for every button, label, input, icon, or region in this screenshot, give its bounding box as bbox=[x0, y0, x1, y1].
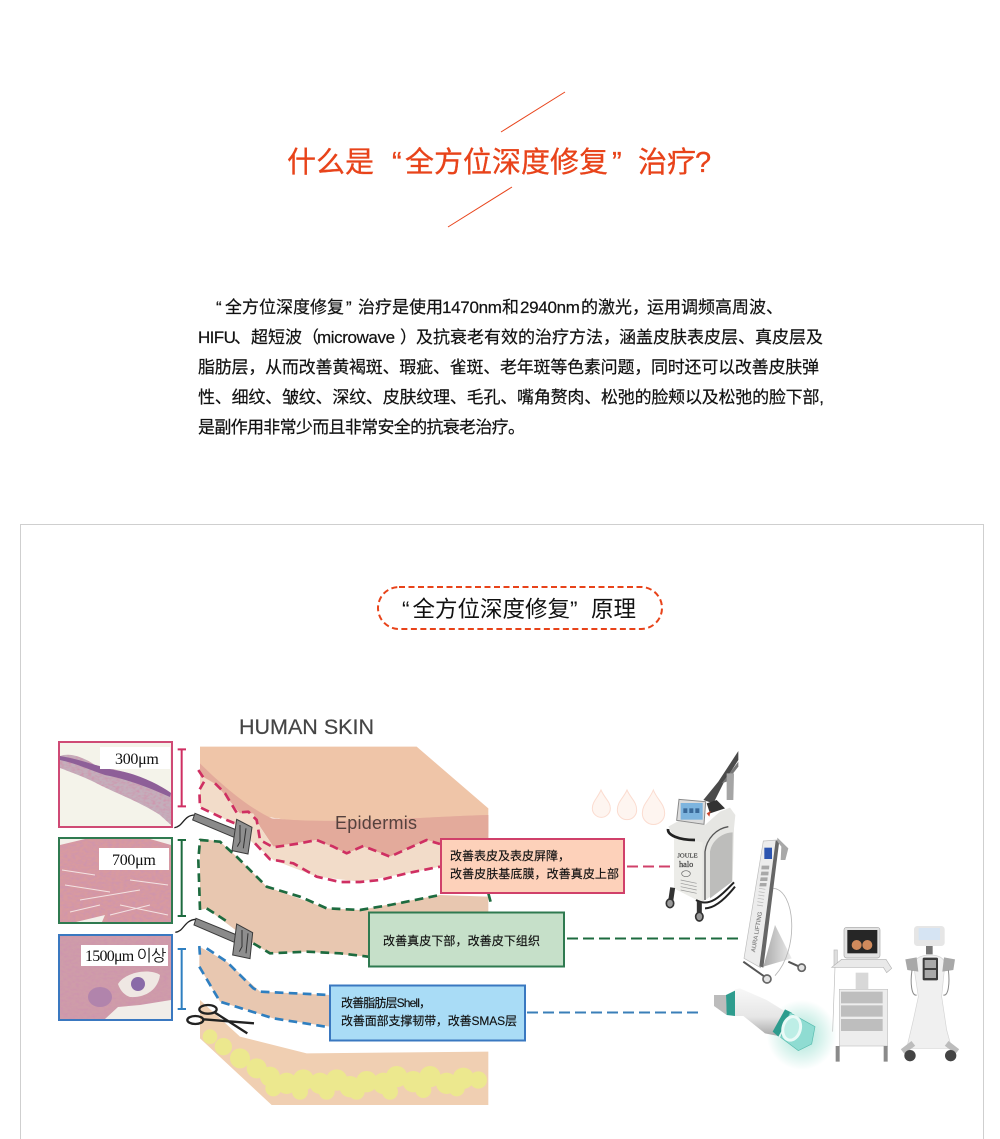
icon: water drops bbox=[592, 790, 665, 824]
callout: blue bbox=[330, 986, 525, 1040]
callout: green bbox=[369, 912, 564, 966]
intro paragraph: HIFU bbox=[198, 328, 235, 347]
title with accent lines: ” bbox=[612, 147, 622, 179]
title with accent lines: 治疗 bbox=[638, 146, 696, 179]
heading pill: principle: 全方位深度修复 bbox=[412, 597, 570, 622]
intro paragraph: 脂肪层，从而改善黄褐斑、瑕疵、雀斑、老年斑等色素问题，同时还可以改善皮肤弹 bbox=[198, 358, 819, 377]
device: aura lifting bbox=[743, 838, 805, 983]
pink dashed outline bbox=[198, 770, 440, 882]
callout: green: 改善真皮下部，改善皮下组织 bbox=[383, 933, 540, 948]
intro paragraph: “ bbox=[216, 298, 222, 317]
histology 300 micrometre bbox=[59, 742, 172, 827]
title with accent lines: 全方位深度修复 bbox=[405, 146, 608, 179]
intro paragraph: 全方位深度修复 bbox=[225, 298, 344, 317]
probe: upper bbox=[174, 813, 252, 854]
title with accent lines: 什么是 bbox=[287, 146, 374, 179]
dermis layer bbox=[200, 838, 488, 957]
callout: pink bbox=[441, 839, 624, 893]
title with accent lines bbox=[287, 92, 711, 227]
intro paragraph: 运用调频高周波、 bbox=[647, 298, 783, 317]
callout: blue: 改善面部支撑韧带，改善SMAS层 bbox=[341, 1013, 517, 1028]
connector: pink bbox=[627, 866, 671, 868]
intro paragraph: 性、细纹、皱纹、深纹、皮肤纹理、毛孔、嘴角赘肉、松弛的脸颊以及松弛的脸下部, bbox=[198, 388, 824, 407]
intro paragraph: 是副作用非常少而且非常安全的抗衰老治疗。 bbox=[198, 418, 525, 437]
heading pill: principle bbox=[378, 587, 662, 629]
label: 1500: 1500μm 이상 bbox=[85, 947, 166, 965]
icon: scissors bbox=[187, 1005, 254, 1033]
green dashed outline bbox=[198, 840, 491, 957]
device: handpiece bbox=[714, 988, 837, 1070]
heading pill: principle: ” bbox=[570, 597, 578, 622]
title with accent lines: “ bbox=[392, 147, 402, 179]
blue dashed outline bbox=[199, 946, 330, 1027]
intro paragraph: 、超短波（ bbox=[234, 328, 319, 347]
intro paragraph: ） bbox=[400, 328, 417, 347]
intro paragraph: 及抗衰老有效的治疗方法， bbox=[416, 328, 620, 347]
intro paragraph: 的激光， bbox=[581, 298, 649, 317]
title with accent lines: ? bbox=[695, 147, 711, 179]
callout: pink: 改善皮肤基底膜，改善真皮上部 bbox=[450, 866, 619, 881]
fat layer shell bbox=[199, 947, 330, 1027]
label: 700: 700μm bbox=[112, 852, 156, 869]
device: ultrasound cart bbox=[832, 927, 892, 1062]
subcutaneous fat bbox=[200, 1000, 488, 1105]
device: aura lifting: AURA LIFTING bbox=[751, 911, 764, 953]
intro paragraph: 治疗是使用 bbox=[358, 297, 443, 317]
depth bracket: pink bbox=[178, 749, 186, 806]
probe: lower bbox=[175, 918, 253, 959]
intro paragraph: 和 bbox=[502, 298, 519, 317]
heading pill: principle: 原理 bbox=[591, 597, 636, 622]
heading pill: principle: “ bbox=[402, 597, 410, 622]
intro paragraph: microwave bbox=[317, 328, 395, 347]
depth bracket: green bbox=[178, 840, 186, 916]
histology 1500 micrometre bbox=[59, 935, 172, 1020]
device: white console bbox=[903, 926, 957, 1061]
intro paragraph: 1470nm bbox=[442, 298, 502, 317]
intro paragraph: 涵盖皮肤表皮层、真皮层及 bbox=[619, 328, 823, 347]
connector: green bbox=[567, 938, 741, 940]
skin layers diagram bbox=[174, 747, 491, 1105]
histology 700 micrometre bbox=[59, 838, 172, 923]
callout: blue: 改善脂肪层Shell， bbox=[341, 995, 431, 1010]
panel: principle bbox=[20, 524, 984, 1139]
device: laser cart: halo bbox=[679, 860, 693, 869]
epidermis block bbox=[200, 747, 488, 882]
intro paragraph bbox=[198, 297, 824, 437]
intro paragraph: ” bbox=[346, 298, 352, 317]
depth bracket: blue bbox=[178, 949, 186, 1009]
device: laser cart: JOULE bbox=[677, 852, 698, 859]
callout: pink: 改善表皮及表皮屏障， bbox=[450, 848, 570, 863]
skin diagram heading: HUMAN SKIN bbox=[239, 715, 374, 739]
connector: blue bbox=[527, 1012, 700, 1014]
epidermis label: Epidermis bbox=[335, 813, 417, 833]
device: laser cart bbox=[666, 751, 738, 921]
label: 300: 300μm bbox=[115, 751, 159, 768]
intro paragraph: 2940nm bbox=[520, 298, 580, 317]
